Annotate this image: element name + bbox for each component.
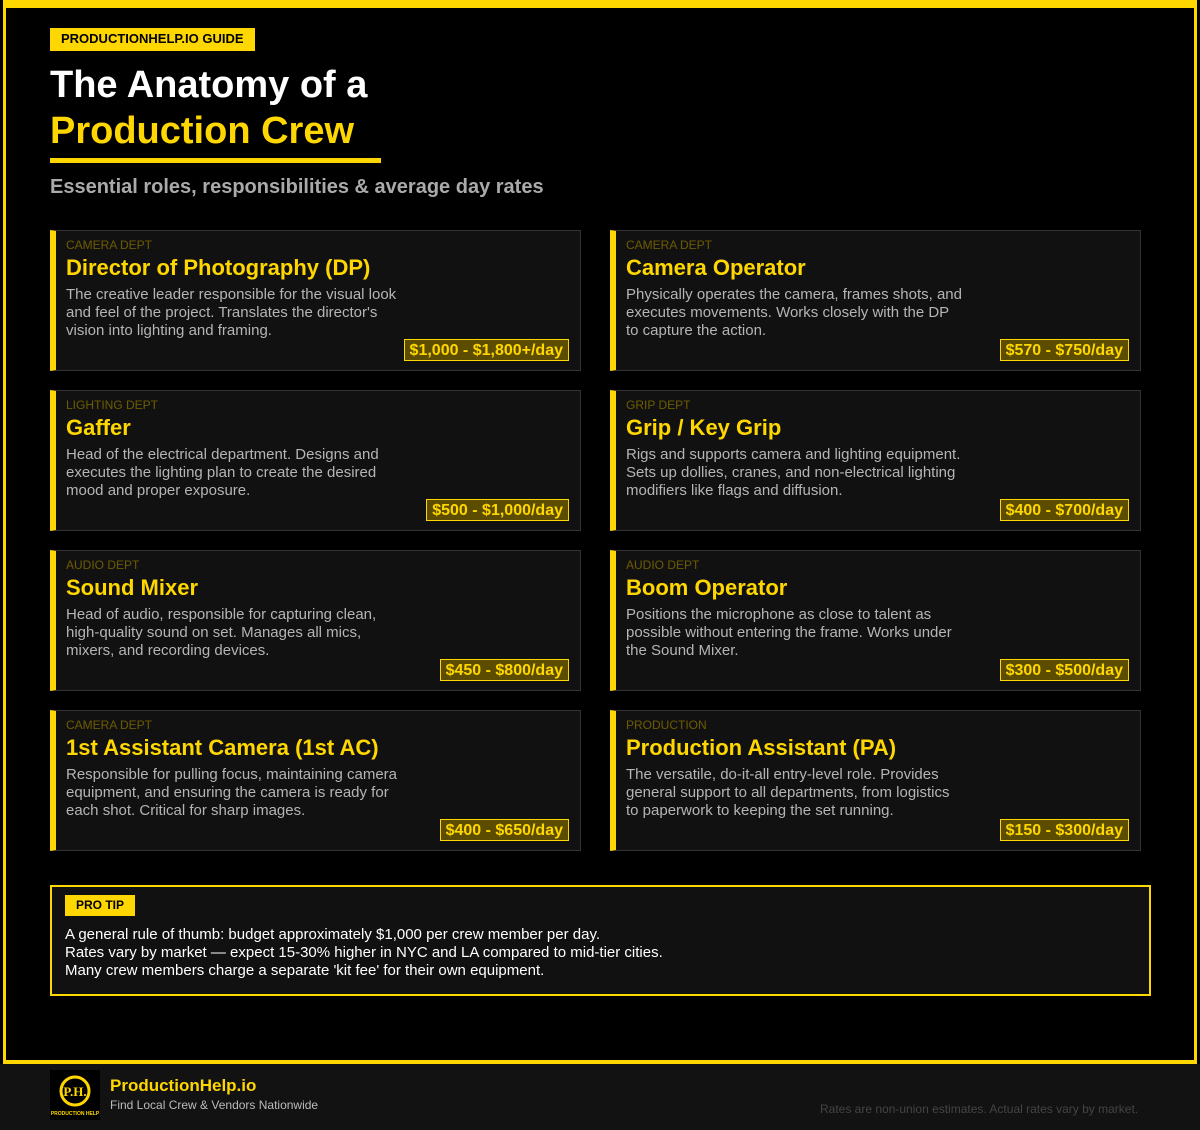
card: camera operator [610, 230, 1141, 371]
title: Production Crew [50, 110, 354, 152]
card: boom operator: Boom Operator [626, 575, 787, 600]
card: grip: Rigs and supports camera and lighting equipment. Sets up dollies, cranes, and non-electrical lighting modifiers like flags and diffusion. [626, 446, 960, 499]
card: gaffer: LIGHTING DEPT [66, 398, 158, 412]
card: PA: Production Assistant (PA) [626, 735, 896, 760]
card: grip [610, 390, 1141, 531]
card: DP: Director of Photography (DP) [66, 255, 370, 280]
card: PA: The versatile, do-it-all entry-level role. Provides general support to all departments, from logistics to paperwork to keeping the set running. [626, 766, 950, 819]
card: sound mixer: Head of audio, responsible for capturing clean, high-quality sound on set. Manages all mics, mixers, and recording devices. [66, 606, 376, 659]
card: gaffer: Head of the electrical department. Designs and executes the lighting plan to create the desired mood and proper exposure. [66, 446, 379, 499]
card: gaffer: $500 - $1,000/day [432, 502, 563, 519]
card: boom operator: $300 - $500/day [1006, 662, 1123, 679]
card: sound mixer: $450 - $800/day [446, 662, 563, 679]
card: grip: $400 - $700/day [1006, 502, 1123, 519]
badge: guide [50, 28, 255, 51]
card: DP: The creative leader responsible for the visual look and feel of the project. Translates the director's vision into lighting and framing. [66, 286, 396, 339]
icon: logo [50, 1070, 100, 1120]
title underline [50, 158, 381, 163]
icon: logo: P.H. [63, 1084, 87, 1099]
card: boom operator: AUDIO DEPT [626, 558, 699, 572]
card: grip: Grip / Key Grip [626, 415, 781, 440]
pro tip panel [50, 885, 1151, 996]
tagline: Find Local Crew & Vendors Nationwide [110, 1098, 318, 1112]
card: PA: PRODUCTION [626, 718, 707, 732]
card: sound mixer: Sound Mixer [66, 575, 198, 600]
card: 1st AC: 1st Assistant Camera (1st AC) [66, 735, 379, 760]
card: camera operator: Camera Operator [626, 255, 806, 280]
disclaimer: Rates are non-union estimates. Actual rates vary by market. [820, 1102, 1138, 1116]
title [50, 64, 368, 152]
pro tip text: A general rule of thumb: budget approximately $1,000 per crew member per day. [65, 926, 600, 943]
card: grip: GRIP DEPT [626, 398, 690, 412]
card: boom operator: Positions the microphone as close to talent as possible without entering the frame. Works under the Sound Mixer. [626, 606, 952, 659]
icon: logo: PRODUCTION HELP [51, 1111, 100, 1117]
card: camera operator: Physically operates the camera, frames shots, and executes movements. Works closely with the DP to capture the action. [626, 286, 962, 339]
card: 1st AC: Responsible for pulling focus, maintaining camera equipment, and ensuring the camera is ready for each shot. Critical for sharp images. [66, 766, 397, 819]
title: The Anatomy of a [50, 64, 367, 106]
card: DP: CAMERA DEPT [66, 238, 152, 252]
card: DP [50, 230, 581, 371]
card: PA: $150 - $300/day [1006, 822, 1123, 839]
pro tip text: Rates vary by market — expect 15-30% higher in NYC and LA compared to mid-tier cities. [65, 944, 663, 961]
card: sound mixer: AUDIO DEPT [66, 558, 139, 572]
card: camera operator: CAMERA DEPT [626, 238, 712, 252]
pro tip text [65, 926, 663, 979]
card: 1st AC [50, 710, 581, 851]
card: camera operator: $570 - $750/day [1006, 342, 1123, 359]
card: 1st AC: $400 - $650/day [446, 822, 563, 839]
footer [0, 1064, 1200, 1130]
pro tip badge [65, 895, 135, 916]
brand name: ProductionHelp.io [110, 1076, 256, 1095]
card: gaffer [50, 390, 581, 531]
card: gaffer: Gaffer [66, 415, 131, 440]
pro tip text: Many crew members charge a separate 'kit fee' for their own equipment. [65, 962, 544, 979]
card: DP: $1,000 - $1,800+/day [410, 342, 563, 359]
subtitle: Essential roles, responsibilities & average day rates [50, 176, 544, 198]
pro tip badge: PRO TIP [76, 898, 124, 912]
card: PA [610, 710, 1141, 851]
card: 1st AC: CAMERA DEPT [66, 718, 152, 732]
badge: guide: PRODUCTIONHELP.IO GUIDE [61, 31, 244, 46]
card: boom operator [610, 550, 1141, 691]
card: sound mixer [50, 550, 581, 691]
